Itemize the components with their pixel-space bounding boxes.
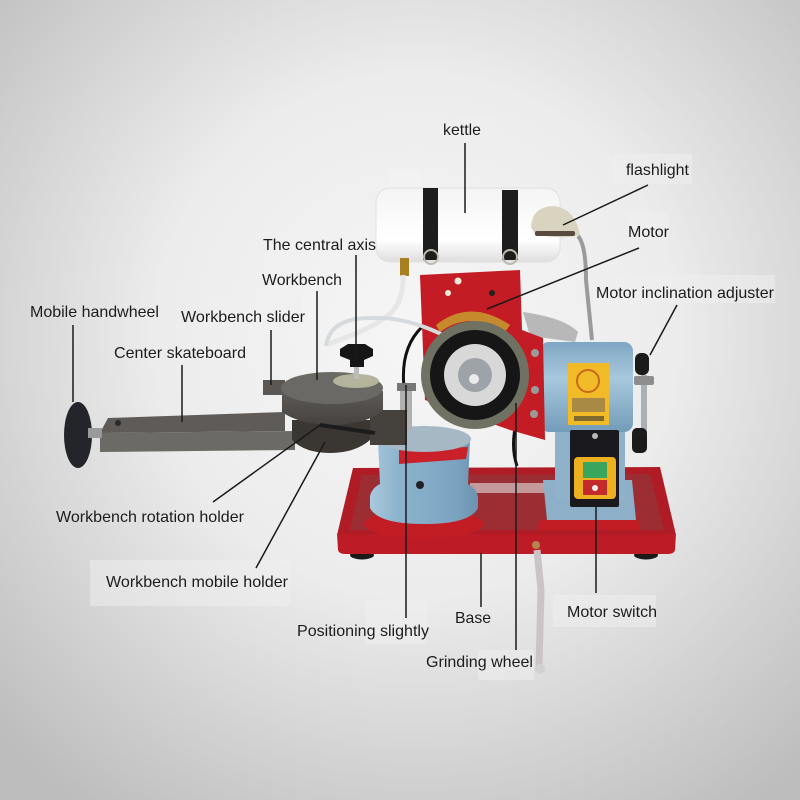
- mobile handwheel: [64, 402, 102, 468]
- label: center skateboard: [114, 345, 246, 422]
- label: center skateboard: Center skateboard: [114, 345, 246, 362]
- label: flashlight: [563, 154, 692, 225]
- label: positioning slightly: [297, 385, 429, 644]
- label: motor inclination adjuster: [596, 275, 775, 355]
- label: workbench mobile holder: [90, 442, 325, 606]
- drain hose: [532, 541, 545, 674]
- label: motor: [487, 213, 670, 309]
- label: workbench slider: Workbench slider: [181, 309, 306, 326]
- label: motor inclination adjuster: Motor inclination adjuster: [596, 285, 775, 302]
- label: workbench mobile holder: Workbench mobile holder: [106, 574, 289, 591]
- label: grinding wheel: Grinding wheel: [426, 654, 533, 671]
- tray base: [337, 467, 676, 560]
- label: grinding wheel: [426, 403, 534, 680]
- water hose: [326, 318, 445, 346]
- motor stand: [514, 420, 640, 530]
- motor body: [540, 342, 633, 432]
- label: workbench: Workbench: [262, 272, 342, 289]
- blue positioning drum: [364, 426, 484, 538]
- label: motor: Motor: [628, 224, 670, 241]
- yellow warning label: [568, 363, 609, 425]
- label: positioning slightly: Positioning slightly: [297, 623, 429, 640]
- flashlight: [531, 206, 592, 340]
- label: workbench: [262, 272, 342, 380]
- label: base: [455, 553, 491, 627]
- label: mobile handwheel: [30, 304, 159, 402]
- kettle: [328, 170, 560, 344]
- machine illustration: [64, 170, 676, 674]
- workbench and slider: [263, 372, 383, 453]
- red motor housing: [403, 270, 578, 440]
- center skateboard arm: [100, 410, 407, 452]
- grinding wheel: [421, 321, 529, 429]
- label: the central axis: [263, 237, 376, 357]
- label: motor switch: Motor switch: [567, 604, 657, 621]
- label: workbench rotation holder: Workbench rotation holder: [56, 509, 245, 526]
- label: the central axis: The central axis: [263, 237, 376, 254]
- guide post: [397, 383, 416, 431]
- label: kettle: [434, 116, 496, 213]
- label: motor switch: [553, 507, 657, 627]
- label: base: Base: [455, 610, 491, 627]
- label: flashlight: flashlight: [626, 162, 690, 179]
- label: workbench slider: [181, 295, 306, 385]
- motor switch box: [570, 430, 619, 507]
- central axis knob: [333, 344, 379, 388]
- label: kettle: kettle: [443, 122, 481, 139]
- motor inclination handle: [632, 353, 654, 453]
- label: mobile handwheel: Mobile handwheel: [30, 304, 159, 321]
- label: workbench rotation holder: [56, 425, 320, 526]
